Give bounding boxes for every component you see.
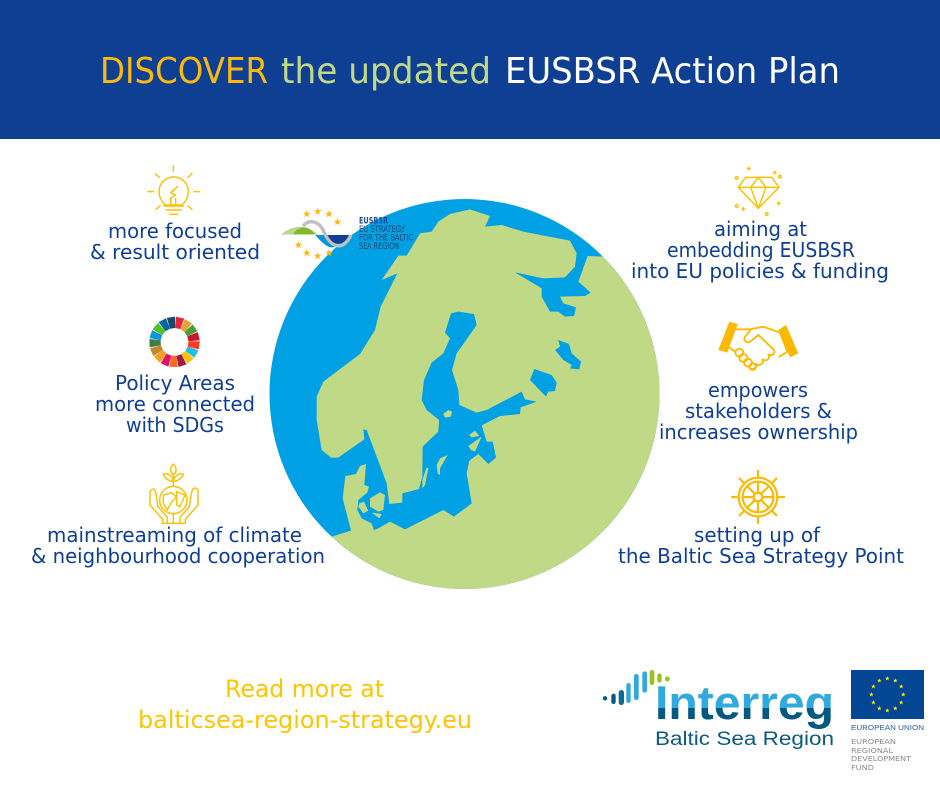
- icon: SDG wheel: [149, 317, 200, 367]
- Interreg logo: Baltic Sea Region: [655, 729, 834, 750]
- title: EUSBSR Action Plan: [505, 51, 840, 92]
- text: policy areas: [95, 371, 255, 437]
- text: aiming at: [631, 217, 889, 283]
- text: aiming at: into EU policies & funding: [631, 259, 889, 283]
- text: strategy point: the Baltic Sea Strategy Point: [618, 544, 904, 568]
- EUSBSR logo: EU STRATEGY: [359, 225, 406, 235]
- text: more focused: more focused: [108, 219, 242, 243]
- icon: diamond: [735, 167, 781, 215]
- text: policy areas: Policy Areas: [115, 371, 235, 395]
- EUSBSR logo: EUSBSR: [359, 216, 388, 226]
- title: the updated: [281, 51, 491, 92]
- land: [316, 209, 660, 589]
- EU flag: EUROPEAN: [851, 738, 896, 746]
- text: mainstreaming: mainstreaming of climate: [47, 523, 302, 547]
- ocean: [270, 199, 660, 589]
- EU flag: REGIONAL: [851, 747, 893, 755]
- globe map: [270, 199, 660, 589]
- EUSBSR logo: [281, 208, 413, 259]
- Interreg logo: [603, 670, 834, 750]
- text: empowers: [659, 378, 858, 444]
- EUSBSR logo: FOR THE BALTIC: [359, 234, 413, 244]
- icon: hands holding globe and plant: [150, 464, 198, 523]
- EU flag: EUROPEAN UNION: [851, 725, 924, 732]
- signal bars: [603, 670, 670, 705]
- read more link: Read more at: [225, 675, 384, 703]
- text: aiming at: aiming at: [714, 217, 807, 241]
- text: empowers: increases ownership: [659, 420, 858, 444]
- read more link: [138, 675, 472, 734]
- text: strategy point: setting up of: [694, 523, 821, 547]
- text: aiming at: embedding EUSBSR: [667, 238, 855, 262]
- EU flag: DEVELOPMENT: [851, 755, 912, 763]
- text: strategy point: [618, 523, 904, 568]
- read more link: balticsea-region-strategy.eu: [138, 706, 472, 734]
- icon: handshake: [718, 322, 798, 370]
- text: empowers: empowers: [708, 378, 808, 402]
- text: policy areas: more connected: [95, 392, 255, 416]
- text: mainstreaming: [31, 523, 325, 568]
- title: DISCOVER: [100, 51, 268, 92]
- Interreg logo: Interreg: [655, 676, 834, 729]
- text: policy areas: with SDGs: [126, 413, 224, 437]
- EUSBSR logo: SEA REGION: [359, 242, 399, 252]
- icon: ship wheel: [732, 471, 784, 523]
- title: [100, 51, 840, 92]
- icon: lightbulb: [148, 166, 199, 214]
- EU flag: [851, 670, 924, 772]
- header banner: [0, 0, 940, 139]
- EU flag: FUND: [851, 764, 874, 772]
- text: mainstreaming: & neighbourhood cooperation: [31, 544, 325, 568]
- text: empowers: stakeholders &: [685, 399, 832, 423]
- text: more focused: [90, 219, 260, 264]
- text: more focused: & result oriented: [90, 240, 260, 264]
